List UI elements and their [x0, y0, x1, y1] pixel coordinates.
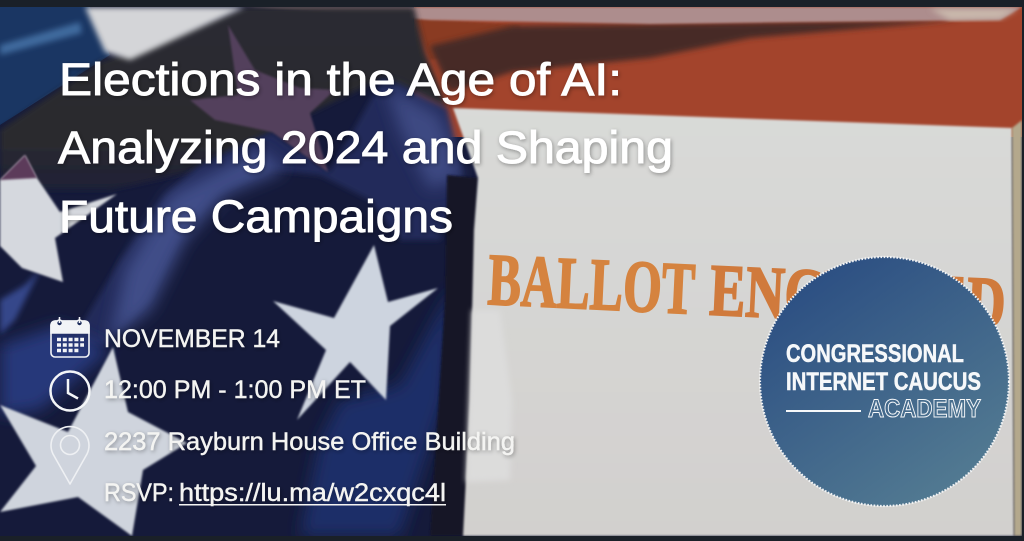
- icon: map pin: [51, 427, 89, 484]
- badge circle: [760, 257, 1009, 506]
- RSVP link: https://lu.ma/w2cxqc4l: [179, 479, 446, 507]
- flag stars: [0, 7, 438, 536]
- event time: 12:00 PM - 1:00 PM ET: [104, 376, 366, 404]
- event date: [51, 317, 280, 357]
- bottom bar: [0, 536, 1024, 541]
- logo wordmark: ACADEMY: [868, 395, 981, 423]
- navy flag folds: [0, 7, 478, 536]
- ballot paper: [453, 108, 1014, 536]
- event location: 2237 Rayburn House Office Building: [104, 428, 515, 456]
- icon: clock: [50, 372, 90, 410]
- ballot stamp text: [487, 254, 1004, 325]
- event time: [50, 372, 366, 410]
- logo wordmark: CONGRESSIONAL: [786, 340, 964, 368]
- ballot stamp text: BALLOT: [486, 239, 697, 331]
- RSVP link: RSVP:: [104, 479, 174, 507]
- title: Future Campaigns: [59, 191, 453, 242]
- title: Elections in the Age of AI:: [59, 54, 622, 105]
- event date: NOVEMBER 14: [104, 325, 280, 353]
- top bar: [0, 0, 1024, 7]
- icon: calendar: [51, 317, 89, 357]
- logo wordmark: INTERNET CAUCUS: [786, 368, 981, 396]
- mottled fold highlights: [70, 78, 462, 345]
- title: [58, 54, 673, 242]
- title: Analyzing 2024 and Shaping: [58, 122, 673, 173]
- logo badge: [760, 257, 1009, 506]
- event location: [51, 427, 515, 484]
- logo wordmark: [786, 340, 981, 423]
- red fabric: [240, 7, 1022, 137]
